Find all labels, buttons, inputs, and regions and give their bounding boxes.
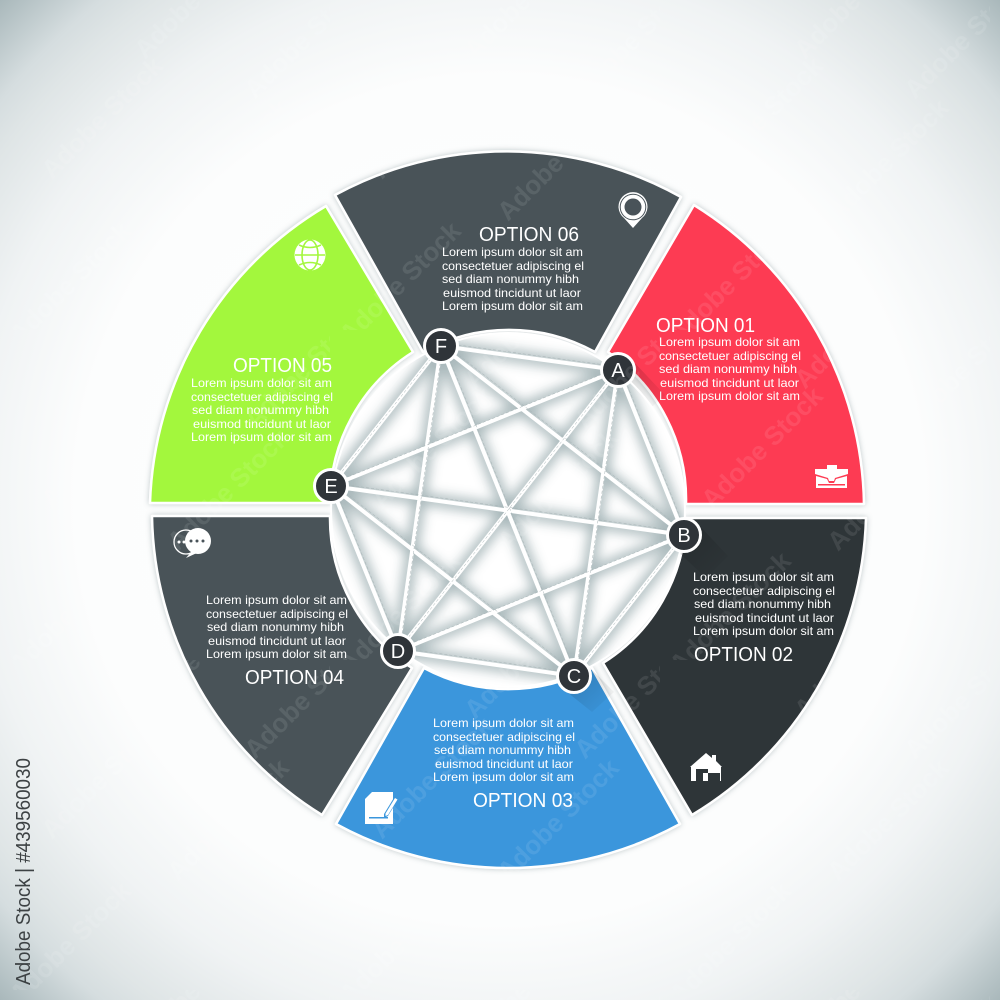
- text block: option 04: consectetuer adipiscing el: [206, 607, 348, 621]
- text block: option 04: Lorem ipsum dolor sit am: [206, 647, 347, 661]
- icon: location pin: [619, 192, 648, 228]
- text block: option 02: sed diam nonummy hibh: [694, 597, 831, 611]
- heading: option 04: OPTION 04: [245, 667, 344, 689]
- heading: option 01: OPTION 01: [656, 315, 755, 337]
- text block: option 01: euismod tincidunt ut laor: [660, 376, 799, 390]
- text block: option 05: euismod tincidunt ut laor: [193, 417, 331, 431]
- icon: house: [690, 753, 722, 781]
- text block: option 02: euismod tincidunt ut laor: [695, 611, 834, 625]
- icon: globe: [294, 240, 326, 270]
- text block: option 06: [442, 245, 584, 313]
- heading: option 03: OPTION 03: [473, 790, 573, 812]
- node A: [602, 354, 634, 386]
- node F: [424, 330, 458, 362]
- text block: option 06: euismod tincidunt ut laor: [443, 286, 581, 300]
- panel: option 04: [152, 516, 412, 815]
- text block: option 01: Lorem ipsum dolor sit am: [659, 389, 800, 403]
- text block: option 03: Lorem ipsum dolor sit am: [433, 716, 574, 730]
- node D: D: [391, 641, 405, 663]
- node A: A: [611, 360, 625, 382]
- text block: option 01: sed diam nonummy hibh: [659, 362, 797, 376]
- text block: option 02: Lorem ipsum dolor sit am: [693, 624, 834, 638]
- text block: option 03: consectetuer adipiscing el: [433, 730, 575, 744]
- text block: option 06: Lorem ipsum dolor sit am: [442, 245, 583, 259]
- text block: option 03: euismod tincidunt ut laor: [435, 757, 573, 771]
- text block: option 05: [191, 376, 333, 444]
- panel: option 02: [603, 518, 866, 815]
- text block: option 01: Lorem ipsum dolor sit am: [659, 335, 800, 349]
- text block: option 04: Lorem ipsum dolor sit am: [206, 593, 347, 607]
- text block: option 05: Lorem ipsum dolor sit am: [191, 430, 332, 444]
- text block: option 03: sed diam nonummy hibh: [434, 743, 571, 757]
- long shadows of nodes: [562, 358, 728, 712]
- text block: option 06: Lorem ipsum dolor sit am: [442, 299, 583, 313]
- node E: E: [324, 476, 338, 498]
- heading: option 05: OPTION 05: [233, 355, 332, 377]
- node E: [314, 470, 348, 502]
- text block: option 03: Lorem ipsum dolor sit am: [433, 770, 574, 784]
- text block: option 05: sed diam nonummy hibh: [192, 403, 329, 417]
- node D: [382, 634, 414, 668]
- node B: B: [677, 525, 691, 547]
- text block: option 01: [659, 335, 801, 403]
- text block: option 04: [206, 593, 348, 661]
- text block: option 04: euismod tincidunt ut laor: [208, 634, 346, 648]
- icon: note and pencil: [365, 792, 399, 824]
- heading: option 02: OPTION 02: [694, 644, 793, 666]
- stock label: Adobe Stock | #439560030: [13, 758, 35, 985]
- text block: option 02: Lorem ipsum dolor sit am: [693, 570, 834, 584]
- panel: option 01: [608, 205, 864, 504]
- text block: option 05: consectetuer adipiscing el: [191, 390, 333, 404]
- text block: option 03: [433, 716, 575, 784]
- panel: option 05: [150, 206, 413, 503]
- text block: option 02: consectetuer adipiscing el: [693, 584, 835, 598]
- icon: chat bubbles: [174, 528, 211, 558]
- text block: option 04: sed diam nonummy hibh: [207, 620, 344, 634]
- node C: C: [567, 666, 581, 688]
- node F: F: [435, 336, 447, 358]
- heading: option 06: OPTION 06: [479, 224, 579, 246]
- icon: briefcase: [815, 465, 848, 488]
- text block: option 06: consectetuer adipiscing el: [442, 259, 584, 273]
- node C: [558, 660, 590, 692]
- panel: option 03: [336, 668, 680, 868]
- panel: option 06: [335, 151, 681, 352]
- network diagram: [330, 332, 686, 688]
- text block: option 01: consectetuer adipiscing el: [659, 349, 801, 363]
- node B: [668, 518, 700, 552]
- text block: option 06: sed diam nonummy hibh: [442, 272, 579, 286]
- text block: option 05: Lorem ipsum dolor sit am: [191, 376, 332, 390]
- text block: option 02: [693, 570, 835, 638]
